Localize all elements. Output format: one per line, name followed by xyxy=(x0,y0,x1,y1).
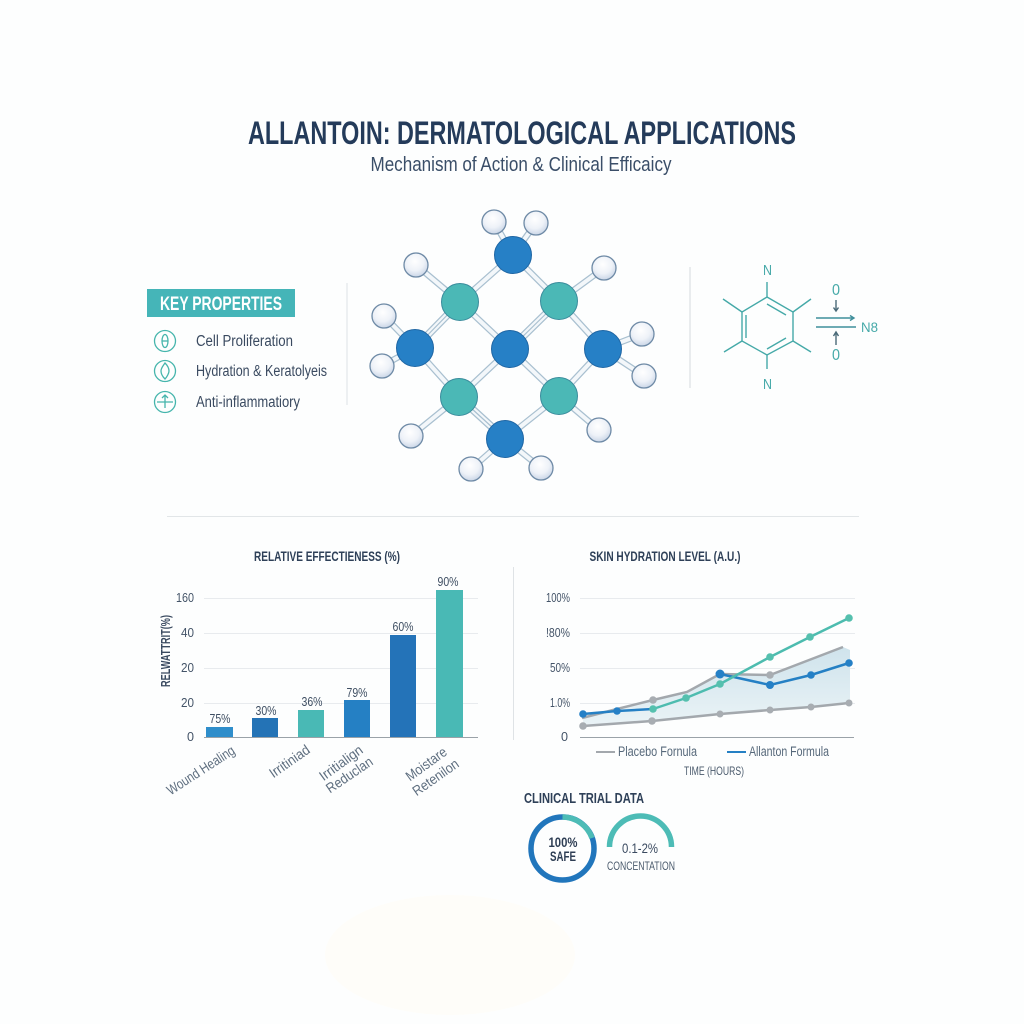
label: cell proliferation: Cell Proliferation xyxy=(196,333,293,350)
blue line xyxy=(579,659,853,718)
chemical structure diagram: N xyxy=(763,376,772,393)
legend xyxy=(596,744,829,759)
y axis labels: 100% xyxy=(546,590,570,605)
category labels: Irritiniad xyxy=(266,741,313,781)
chemical structure diagram: N xyxy=(763,262,772,279)
panel: line chart xyxy=(546,548,855,778)
y axis labels xyxy=(546,590,570,744)
chemical structure diagram: N8 xyxy=(861,319,878,335)
gauge: concentration: CONCENTATION xyxy=(607,861,675,873)
placebo line xyxy=(582,647,849,726)
donut: 100% safe: 100% xyxy=(548,835,578,850)
y axis labels: 20 xyxy=(181,660,194,675)
bar value labels: 36% xyxy=(302,694,323,709)
donut: 100% safe: SAFE xyxy=(550,849,576,864)
y axis labels: 1.0% xyxy=(550,695,570,710)
x axis title: TIME (HOURS) xyxy=(684,764,744,778)
single bonds xyxy=(382,222,644,469)
gauge: concentration: 0.1-2% xyxy=(622,841,658,856)
blue atoms xyxy=(396,236,622,458)
gauge: concentration xyxy=(607,816,675,873)
chemical structure diagram xyxy=(723,262,878,393)
y axis labels xyxy=(176,590,194,744)
bar value labels: 30% xyxy=(256,703,277,718)
molecule diagram xyxy=(370,210,656,481)
label: anti-inflammatory: Anti-inflammatiory xyxy=(196,394,300,411)
legend: Allanton Formula xyxy=(749,744,829,759)
heading: key properties: KEY PROPERTIES xyxy=(160,294,282,315)
icon: cell proliferation xyxy=(154,330,176,352)
label: hydration: Hydration & Keratolyeis xyxy=(196,363,327,380)
category labels: Retenilon xyxy=(409,755,462,799)
legend: Placebo Fornula xyxy=(618,744,697,759)
clinical trial heading: CLINICAL TRIAL DATA xyxy=(524,791,644,807)
teal atoms xyxy=(440,282,578,416)
y axis labels: 20 xyxy=(181,695,194,710)
y axis labels: 160 xyxy=(176,590,194,605)
shaded area xyxy=(583,647,850,726)
category labels: Irritialign xyxy=(316,741,366,784)
donut: 100% safe xyxy=(531,817,594,880)
panel: key properties xyxy=(147,289,327,412)
subtitle: Mechanism of Action & Clinical Efficaicy xyxy=(370,154,672,176)
panel: clinical trial data xyxy=(524,791,675,880)
hydrogen atoms xyxy=(370,210,656,481)
teal line xyxy=(649,614,853,713)
bar value labels: 79% xyxy=(346,685,368,700)
category labels: Wound Healing xyxy=(164,742,238,798)
y axis labels: 0 xyxy=(561,729,568,744)
y axis labels: 0 xyxy=(187,729,194,744)
bar value labels xyxy=(210,574,459,726)
line chart heading: SKIN HYDRATION LEVEL (A.U.) xyxy=(590,548,740,564)
double bonds xyxy=(415,301,559,439)
y axis labels: 40 xyxy=(181,625,194,640)
y axis labels: !80% xyxy=(546,625,570,640)
title: ALLANTOIN: DERMATOLOGICAL APPLICATIONS xyxy=(248,115,796,151)
bar value labels: 75% xyxy=(210,711,231,726)
category labels: Reduclan xyxy=(323,753,376,796)
chemical structure diagram: 0 xyxy=(832,347,840,364)
icon: hydration xyxy=(154,360,176,382)
bars xyxy=(206,590,463,738)
category labels: Moistare xyxy=(402,743,450,784)
heading: key properties xyxy=(147,289,295,317)
chemical structure diagram: 0 xyxy=(832,282,840,299)
bar chart heading: RELATIVE EFFECTIENESS (%) xyxy=(254,548,400,564)
category labels xyxy=(164,741,462,799)
panel: bar chart xyxy=(158,548,478,799)
bar value labels: 60% xyxy=(392,619,414,634)
y axis labels: 50% xyxy=(550,660,570,675)
bar value labels: 90% xyxy=(438,574,459,589)
icon: anti-inflammatory xyxy=(154,392,176,412)
y axis title: RELWATTRIT(%) xyxy=(158,615,173,687)
